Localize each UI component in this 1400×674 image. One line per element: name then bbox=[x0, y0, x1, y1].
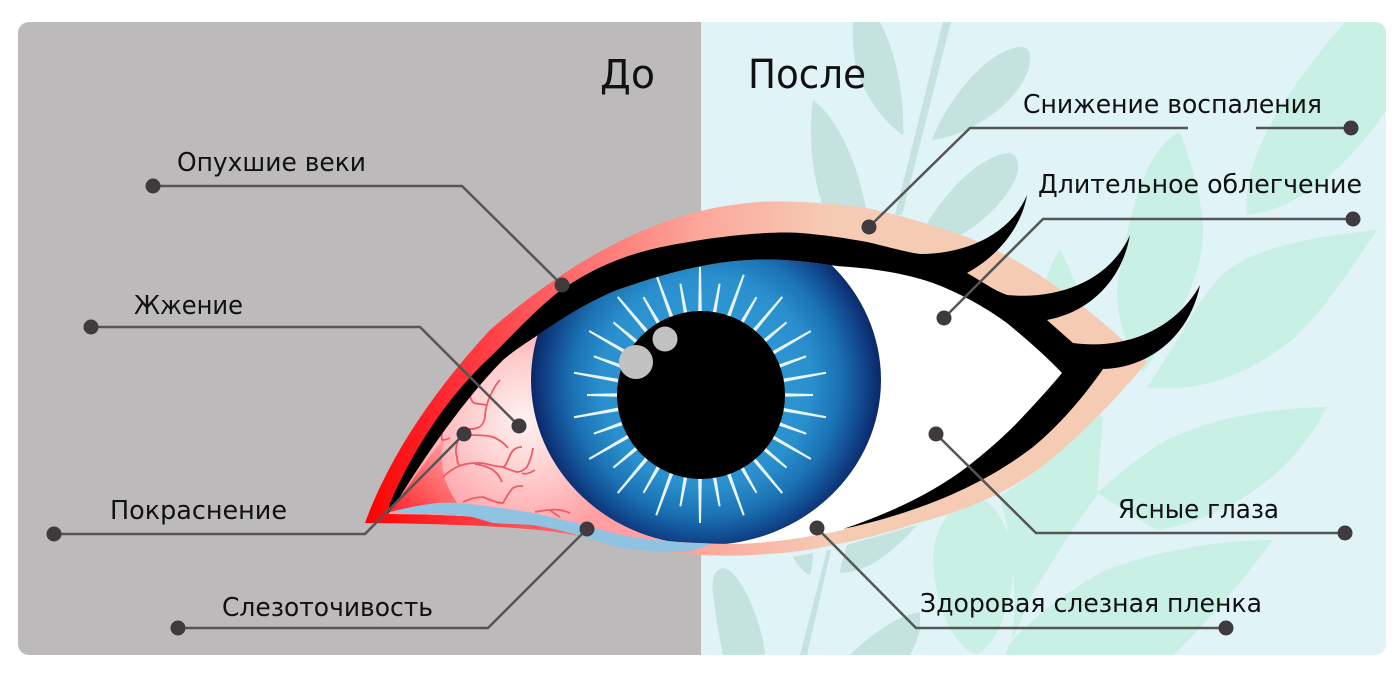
callout: clear eyes: Ясные глаза bbox=[1118, 495, 1279, 525]
iris rays bbox=[574, 267, 826, 523]
heading: after: После bbox=[748, 52, 866, 98]
heading: before: До bbox=[600, 52, 655, 98]
callout: watery eyes: Слезоточивость bbox=[222, 593, 433, 623]
tear film bbox=[390, 503, 710, 552]
eyelashes and lash line bbox=[388, 195, 1200, 529]
callout: healthy tear film: Здоровая слезная пленка bbox=[920, 589, 1262, 619]
callout: redness bbox=[46, 426, 472, 542]
callout: watery eyes bbox=[170, 522, 594, 636]
white of the eye bbox=[388, 259, 1062, 544]
callout: lasting relief bbox=[936, 170, 1362, 326]
pupil bbox=[617, 311, 785, 479]
eye illustration bbox=[365, 195, 1200, 556]
callout: swollen eyelids: Опухшие веки bbox=[177, 148, 366, 178]
blood vessels bbox=[442, 380, 570, 517]
eyelid skin bbox=[365, 201, 1147, 556]
red inner corner bbox=[390, 438, 458, 512]
callout: burning: Жжение bbox=[134, 291, 243, 321]
pupil highlights bbox=[619, 326, 678, 379]
iris bbox=[531, 260, 881, 544]
callout: redness: Покраснение bbox=[110, 496, 287, 526]
callout: reduced inflammation bbox=[862, 90, 1358, 234]
callout: reduced inflammation: Снижение воспаления bbox=[1023, 90, 1322, 120]
callout: burning bbox=[84, 291, 526, 434]
panel: after (light blue with leaves) bbox=[701, 22, 1391, 655]
callout: clear eyes bbox=[928, 426, 1352, 540]
callout: healthy tear film bbox=[810, 520, 1262, 636]
callout: swollen eyelids bbox=[146, 148, 570, 292]
panel: before (grey) bbox=[18, 22, 702, 655]
inflamed sclera bbox=[388, 266, 706, 544]
callout: lasting relief: Длительное облегчение bbox=[1038, 170, 1362, 200]
